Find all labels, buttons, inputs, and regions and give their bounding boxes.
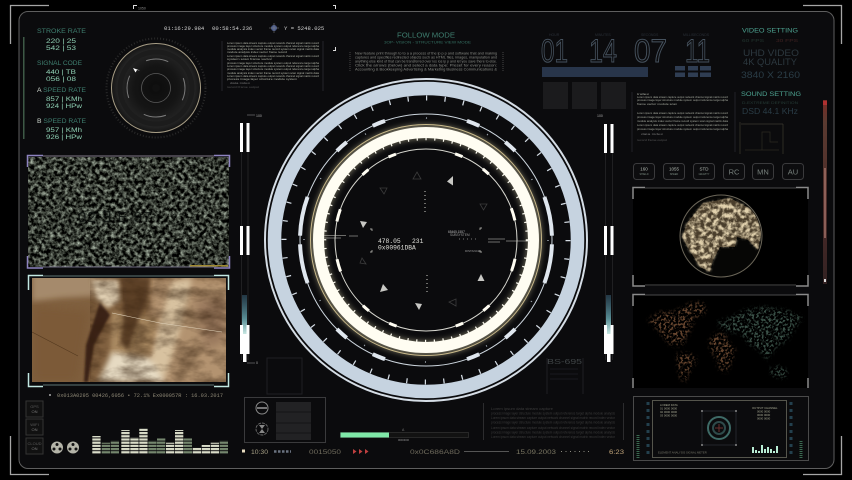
video and sound settings: 60 FPS: [742, 38, 764, 43]
video and sound settings: 3840 X 2160: [741, 70, 800, 80]
follow mode paragraph: New feature print through to to a a process of the ip p p and software that and making: [355, 52, 497, 56]
central coordinates readout: 65465.1557: [448, 230, 465, 234]
right mid data text block: Lorem ipsum data stream capture output network channel signal matrix record: [637, 123, 728, 127]
left vertical sliders: [240, 114, 262, 365]
bottom dim text block: process image layer structure module system output reference target alpha module analysis: [491, 430, 615, 434]
video and sound settings: D-EXTREME DEFINITION: [742, 100, 798, 105]
bottom status strip: 15.09.2003: [516, 449, 556, 456]
digital countdown clock: MINUTES: [595, 33, 611, 37]
bottom status strip: 6:23: [609, 449, 624, 456]
mode buttons: MN: [757, 168, 769, 176]
right mid data text block: data index: [641, 132, 664, 136]
digital countdown clock: 11: [685, 33, 710, 69]
top register marks: [134, 6, 336, 50]
bottom right targeting panel: 0000 0000: [757, 410, 771, 414]
digital countdown clock: 07: [634, 33, 667, 69]
status toggles: [26, 401, 43, 454]
right vertical sliders: 100: [597, 114, 603, 118]
bottom status strip: 10:30: [251, 449, 268, 456]
mode buttons: RC: [729, 168, 740, 176]
left vertical sliders: 100: [256, 114, 262, 118]
radar triangles: [360, 176, 484, 310]
bottom dim text block: Lorem ipsum data stream capture: [491, 407, 553, 411]
follow mode paragraph: [350, 52, 503, 72]
bottom dim text block: process image layer structure module system output reference target alpha module analysis: [491, 412, 615, 416]
film reels: [51, 442, 79, 454]
bottom right targeting panel: 02 0000 0000: [660, 410, 678, 414]
right mid data text block: Lorem ipsum data stream capture output network channel signal matrix record: [637, 111, 728, 115]
glowing yellow-white ring: [310, 124, 542, 356]
green progress bar: [340, 428, 468, 442]
digital countdown clock: HOUR: [549, 33, 560, 37]
mode buttons: GRAVITY: [699, 173, 710, 176]
bottom status strip: 0015050: [309, 449, 341, 456]
central coordinates readout: DISTANCE: [465, 249, 480, 253]
left telemetry readouts: 926 | HPw: [46, 134, 82, 141]
top left data text block: process image layer structure module system output reference target alpha: [227, 44, 319, 48]
mode buttons: AU: [788, 168, 798, 176]
right mid data text block: [632, 92, 735, 152]
time readouts: [164, 23, 324, 33]
top left data text block: process image layer structure module system output reference target alpha: [227, 67, 319, 71]
bottom status strip: 0x0C686A8D: [410, 449, 460, 456]
central coordinates readout: 478.05 231: [378, 238, 424, 245]
top circular gauge: [106, 38, 206, 138]
aerial map panel: [28, 156, 230, 268]
central radar rings: [265, 79, 587, 401]
top left data text block: module analysis index vector frame record: [227, 50, 287, 54]
mode buttons: 160: [640, 166, 648, 172]
bottom right targeting panel: 03 0000 0000: [660, 414, 678, 418]
left telemetry readouts: 542 | 53: [46, 45, 76, 52]
video and sound settings: DSD 44.1 KHz: [742, 107, 798, 116]
left telemetry readouts: A SPEED RATE: [37, 88, 86, 94]
video and sound settings: [741, 28, 801, 116]
mode buttons: 1055: [669, 166, 680, 172]
green progress bar: A: [402, 428, 405, 432]
left vertical sliders: 0: [256, 361, 258, 365]
sepia satellite panel: [28, 274, 230, 386]
follow mode heading: [384, 32, 471, 44]
bottom dim text block: Lorem ipsum data stream capture output network channel signal matrix record index vector: [491, 426, 616, 430]
top left data text block: process image layer structure module system: [227, 77, 298, 81]
central coordinates readout: 0x00961DBA: [378, 244, 416, 252]
bottom right targeting panel: 01 0000 0000: [660, 406, 678, 410]
digital countdown clock: 14: [589, 33, 617, 69]
right mid data text block: process image layer structure module system output reference target alpha: [637, 127, 728, 131]
top left data text block: Lorem ipsum data stream capture output network channel signal matrix record: [227, 64, 319, 68]
video and sound settings: SOUND SETTING: [741, 91, 801, 98]
left telemetry readouts: 957 | KMh: [46, 127, 82, 134]
video and sound settings: VIDEO SETTING: [742, 28, 798, 34]
dim radar triangles: [360, 172, 487, 306]
left telemetry readouts: 440 | TB: [46, 69, 76, 76]
status toggles: CLOUD: [27, 441, 42, 446]
mode buttons: SHIELD: [639, 173, 649, 176]
left telemetry readouts: 857 | KMh: [46, 96, 82, 103]
bottom right targeting panel: [634, 396, 808, 460]
right mid data text block: frame vector module scan: [637, 102, 677, 106]
bottom icon and text panel: [244, 398, 326, 442]
top left data text block: data index: [230, 81, 251, 85]
central coordinates readout: [378, 230, 480, 253]
video and sound settings: 30 FPS: [776, 38, 798, 43]
status toggles: WIFI: [30, 422, 39, 427]
outer blue ring: [265, 79, 587, 401]
right mid data text block: Lorem ipsum data stream capture output network channel signal matrix record: [637, 95, 728, 99]
top left data text block: [222, 41, 323, 91]
bottom status strip: [242, 449, 624, 456]
dim striped panels: [543, 82, 626, 109]
left telemetry readouts: 056 | 08: [46, 76, 76, 83]
top left data text block: module analysis index vector frame record system scan signal matrix data: [227, 71, 319, 75]
digital countdown clock: SECONDS: [641, 33, 659, 37]
digital countdown clock: MILLISECONDS: [683, 33, 710, 37]
top left data text block: Lorem ipsum data stream capture output network channel signal matrix record: [227, 54, 319, 58]
status toggles: ON: [32, 427, 38, 432]
follow mode heading: FOLLOW MODE: [397, 32, 455, 40]
follow mode paragraph: captures and specifies redirected objects such as HTML files, images, manipulation and: [355, 56, 497, 60]
globe panel: [633, 188, 808, 286]
aerial map panel: 02 ∃ E 97: [78, 209, 152, 226]
top left data text block: system scan frame vector: [227, 57, 272, 61]
top left data text block: Lorem ipsum data stream capture output network channel signal matrix record: [227, 41, 319, 45]
bottom right targeting panel: 0000 0000: [757, 413, 771, 417]
time readouts: 01:16:29.984: [164, 25, 205, 32]
digital countdown clock: 01: [541, 33, 568, 69]
inner ring: [335, 149, 517, 331]
small lower panels: BS-695: [547, 357, 582, 366]
right mid data text block: record frame output: [637, 138, 667, 142]
mode buttons: SPEED: [670, 173, 678, 176]
bottom right targeting panel: LOREM DATA: [660, 403, 678, 407]
mode buttons: STD: [700, 166, 709, 172]
equalizer bars: [92, 428, 228, 454]
green progress bar: OOOOO: [398, 438, 410, 442]
right mid data text block: process image layer structure module system output reference target alpha: [637, 98, 728, 102]
world map panel: [633, 294, 808, 388]
mode buttons: [634, 164, 804, 180]
middle segmented ring: [300, 114, 552, 366]
small lower panels: [267, 357, 583, 394]
status toggles: GPS: [30, 404, 39, 409]
time readouts: 00:58:54.236: [212, 25, 252, 32]
left telemetry readouts: [23, 29, 86, 141]
bottom dim text block: process image layer structure module system output reference target alpha module analysis: [491, 420, 615, 424]
follow mode paragraph: Accounting & Bookkeeping Advertising & Marketing Business Communications &: [355, 68, 498, 72]
follow mode heading: 3OP- VISION - STRUCTURE VIEW MODE: [384, 40, 471, 44]
video and sound settings: 4K QUALITY: [743, 57, 797, 67]
right mid data text block: index: [637, 92, 650, 96]
top left data text block: process image layer structure module system output reference target alpha: [227, 61, 319, 65]
time readouts: Y = 5248.025: [284, 25, 324, 32]
bottom right targeting panel: 0000 0000: [757, 416, 771, 420]
left telemetry readouts: 924 | HPw: [46, 103, 82, 110]
central coordinates readout: SUBSYSTEM: [450, 233, 470, 237]
right mid data text block: module analysis index vector frame record system scan signal matrix data: [637, 119, 728, 123]
top register marks: 1050: [138, 6, 146, 10]
image caption data line: 0x013A0295 00426,6056 • 72.1% Ex000057R : 16.03.2017: [57, 393, 223, 399]
bottom dim text block: Lorem ipsum data stream capture output network channel signal matrix record index vector: [491, 416, 616, 420]
digital countdown clock: [541, 33, 710, 69]
bottom dim text block: [484, 403, 624, 440]
bottom right targeting panel: OUTPUT CHANNEL: [752, 406, 778, 410]
follow mode paragraph: anything else kind of that can be transferred over ios ios ip p and let you save there to else.: [355, 60, 497, 64]
right mid data text block: process image layer structure module system output reference target alpha: [637, 115, 728, 119]
top left data text block: Lorem ipsum data stream capture output network channel signal matrix record: [227, 74, 319, 78]
crosshair lines and dots: [324, 191, 530, 293]
blue status bar and button grid: [542, 66, 711, 77]
top left data text block: record frame output: [227, 85, 259, 89]
bottom right targeting panel: ELEMENT ANALYSIS SIGNAL METER: [658, 450, 707, 454]
globe: [680, 195, 762, 277]
right vertical meter: [823, 100, 827, 284]
left telemetry readouts: B SPEED RATE: [37, 119, 86, 125]
left telemetry readouts: SIGNAL CODE: [37, 61, 82, 67]
follow mode paragraph: Click the arrows (below) and select a data type: Preset for every reason:: [355, 64, 497, 68]
status toggles: ON: [32, 446, 38, 451]
top left data text block: module analysis index vector frame record system scan signal matrix data: [227, 47, 319, 51]
small chart under sound setting: [740, 122, 783, 154]
left telemetry readouts: 220 | 25: [46, 38, 76, 45]
video and sound settings: UHD VIDEO: [743, 48, 799, 58]
right vertical sliders: [597, 114, 614, 362]
bottom dim text block: Lorem ipsum data stream capture output network channel signal matrix record index vector: [491, 435, 616, 439]
status toggles: ON: [32, 409, 38, 414]
left telemetry readouts: STROKE RATE: [37, 29, 86, 35]
